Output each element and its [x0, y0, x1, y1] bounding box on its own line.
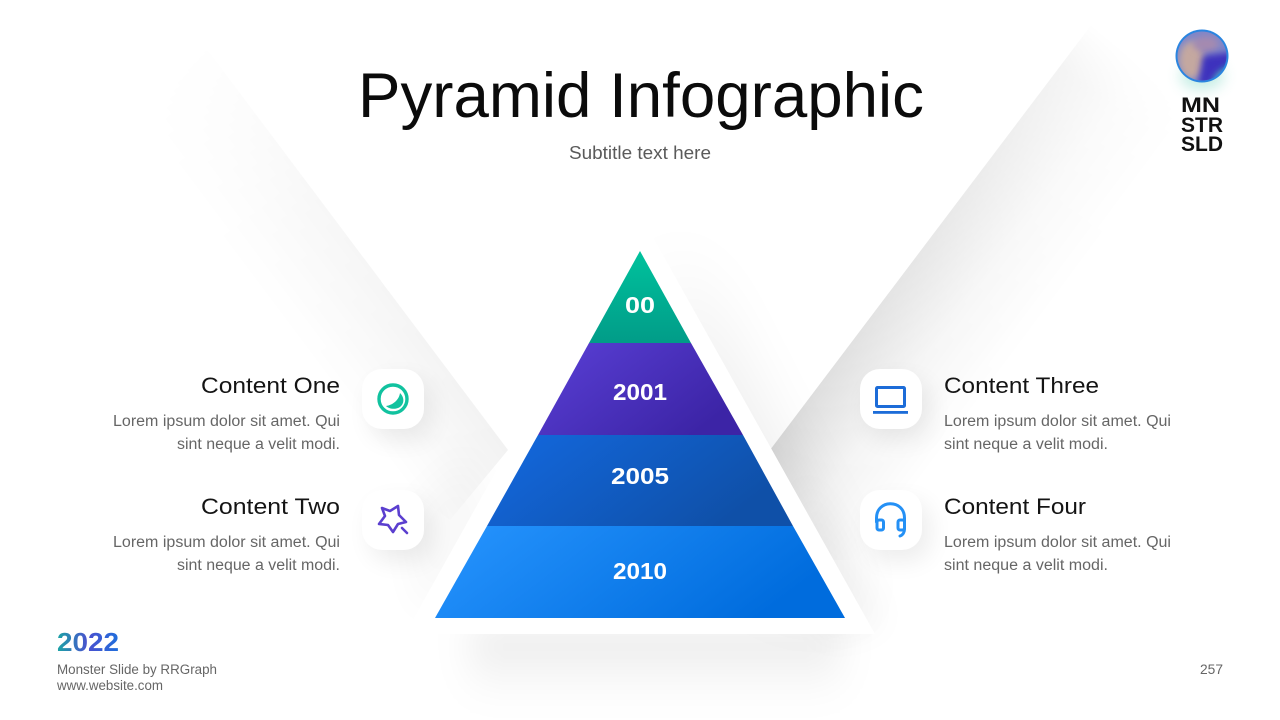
- content one: [113, 373, 340, 453]
- heading: content one: Content One: [201, 373, 340, 398]
- footer text: Monster Slide by RRGraph: [57, 662, 217, 677]
- title: Pyramid Infographic: [358, 61, 924, 131]
- text: content one: [113, 413, 340, 453]
- text: content two: Lorem ipsum dolor sit amet. Qui: [113, 534, 340, 551]
- text: content four: sint neque a velit modi.: [944, 557, 1108, 574]
- page number: 257: [1200, 661, 1223, 677]
- logo text: STR: [1181, 114, 1223, 137]
- layer: 2001: 2001: [613, 379, 667, 405]
- icon: headset: [860, 490, 930, 561]
- text: content three: Lorem ipsum dolor sit amet. Qui: [944, 413, 1171, 430]
- layer: 2010: 2010: [613, 558, 667, 584]
- logo text: SLD: [1181, 133, 1223, 156]
- logo text: [1181, 94, 1223, 156]
- subtitle: Subtitle text here: [569, 142, 711, 163]
- logo text: MN: [1181, 94, 1220, 117]
- layer: 2001: [538, 343, 743, 435]
- footer year: 2022: [57, 627, 119, 657]
- layer: 2005: 2005: [611, 463, 669, 489]
- logo: [1176, 30, 1232, 156]
- logo sphere: [1176, 30, 1232, 90]
- text: content one: Lorem ipsum dolor sit amet. Qui: [113, 413, 340, 430]
- content two: [113, 494, 340, 574]
- white pyramid plate: [405, 214, 875, 634]
- icon: laptop: [860, 369, 930, 440]
- layer: 2010: [435, 526, 845, 618]
- text: content two: sint neque a velit modi.: [177, 557, 340, 574]
- layer: 00: [589, 251, 691, 343]
- background shadows: [344, 55, 1082, 674]
- footer text: www.website.com: [56, 678, 163, 693]
- heading: content four: Content Four: [944, 494, 1086, 519]
- icon: moon in circle: [362, 369, 432, 440]
- text: content one: sint neque a velit modi.: [177, 436, 340, 453]
- text: content four: [944, 534, 1171, 574]
- text: content three: sint neque a velit modi.: [944, 436, 1108, 453]
- text: content two: [113, 534, 340, 574]
- heading: content two: Content Two: [201, 494, 340, 519]
- content three: [944, 373, 1171, 453]
- icon: magic star: [362, 490, 432, 561]
- text: content three: [944, 413, 1171, 453]
- content four: [944, 494, 1171, 574]
- heading: content three: Content Three: [944, 373, 1099, 398]
- footer text: [56, 662, 217, 693]
- pyramid: [435, 251, 845, 618]
- layer: 2005: [487, 435, 793, 526]
- text: content four: Lorem ipsum dolor sit amet. Qui: [944, 534, 1171, 551]
- layer: 00: 00: [625, 292, 655, 318]
